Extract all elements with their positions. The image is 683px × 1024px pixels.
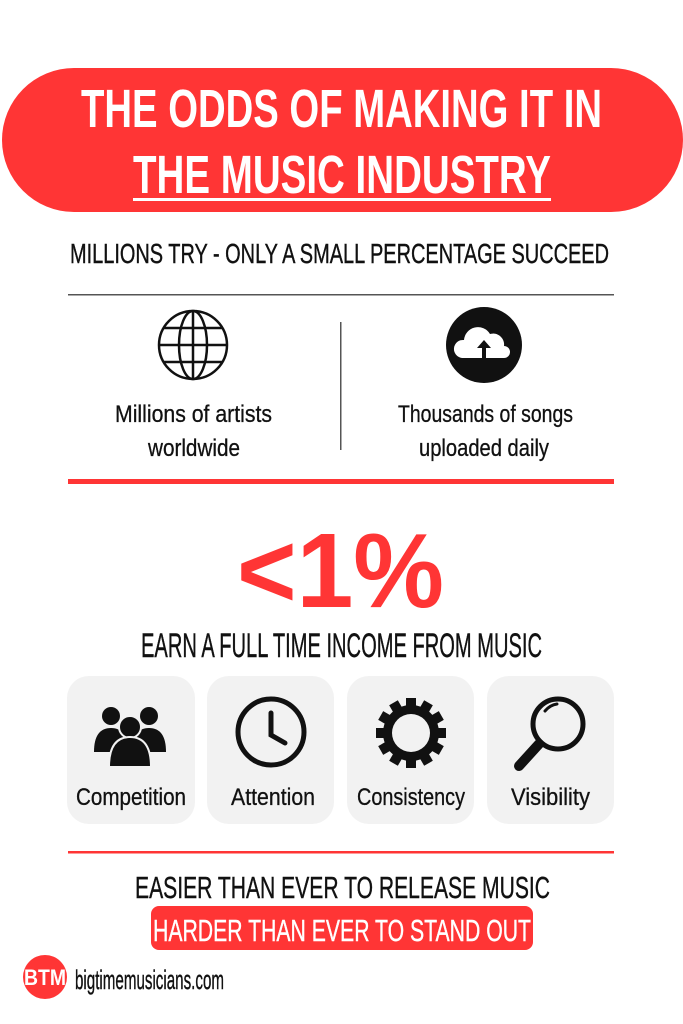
title banner [2, 68, 683, 212]
card: competition [67, 676, 195, 824]
stat: songs [398, 307, 573, 462]
callout: harder [151, 906, 533, 950]
card: visibility [487, 676, 614, 824]
stat: songs: uploaded daily [419, 435, 549, 462]
stat: artists [115, 311, 272, 462]
card: consistency: Consistency [357, 784, 465, 811]
logo [23, 955, 224, 999]
card: visibility: Visibility [511, 784, 590, 811]
card: consistency [347, 676, 474, 824]
big stat: <1% [237, 512, 444, 630]
logo: bigtimemusicians.com [75, 965, 224, 995]
card: competition: Competition [76, 784, 186, 811]
stat: artists: Millions of artists [115, 401, 272, 428]
icon: cloud upload [446, 307, 522, 383]
stat: artists: worldwide [147, 435, 240, 462]
stat: songs: Thousands of songs [398, 401, 573, 428]
card: attention: Attention [231, 784, 315, 811]
logo: BTM [24, 965, 66, 990]
card: attention [207, 676, 334, 824]
icon: globe [159, 311, 227, 379]
